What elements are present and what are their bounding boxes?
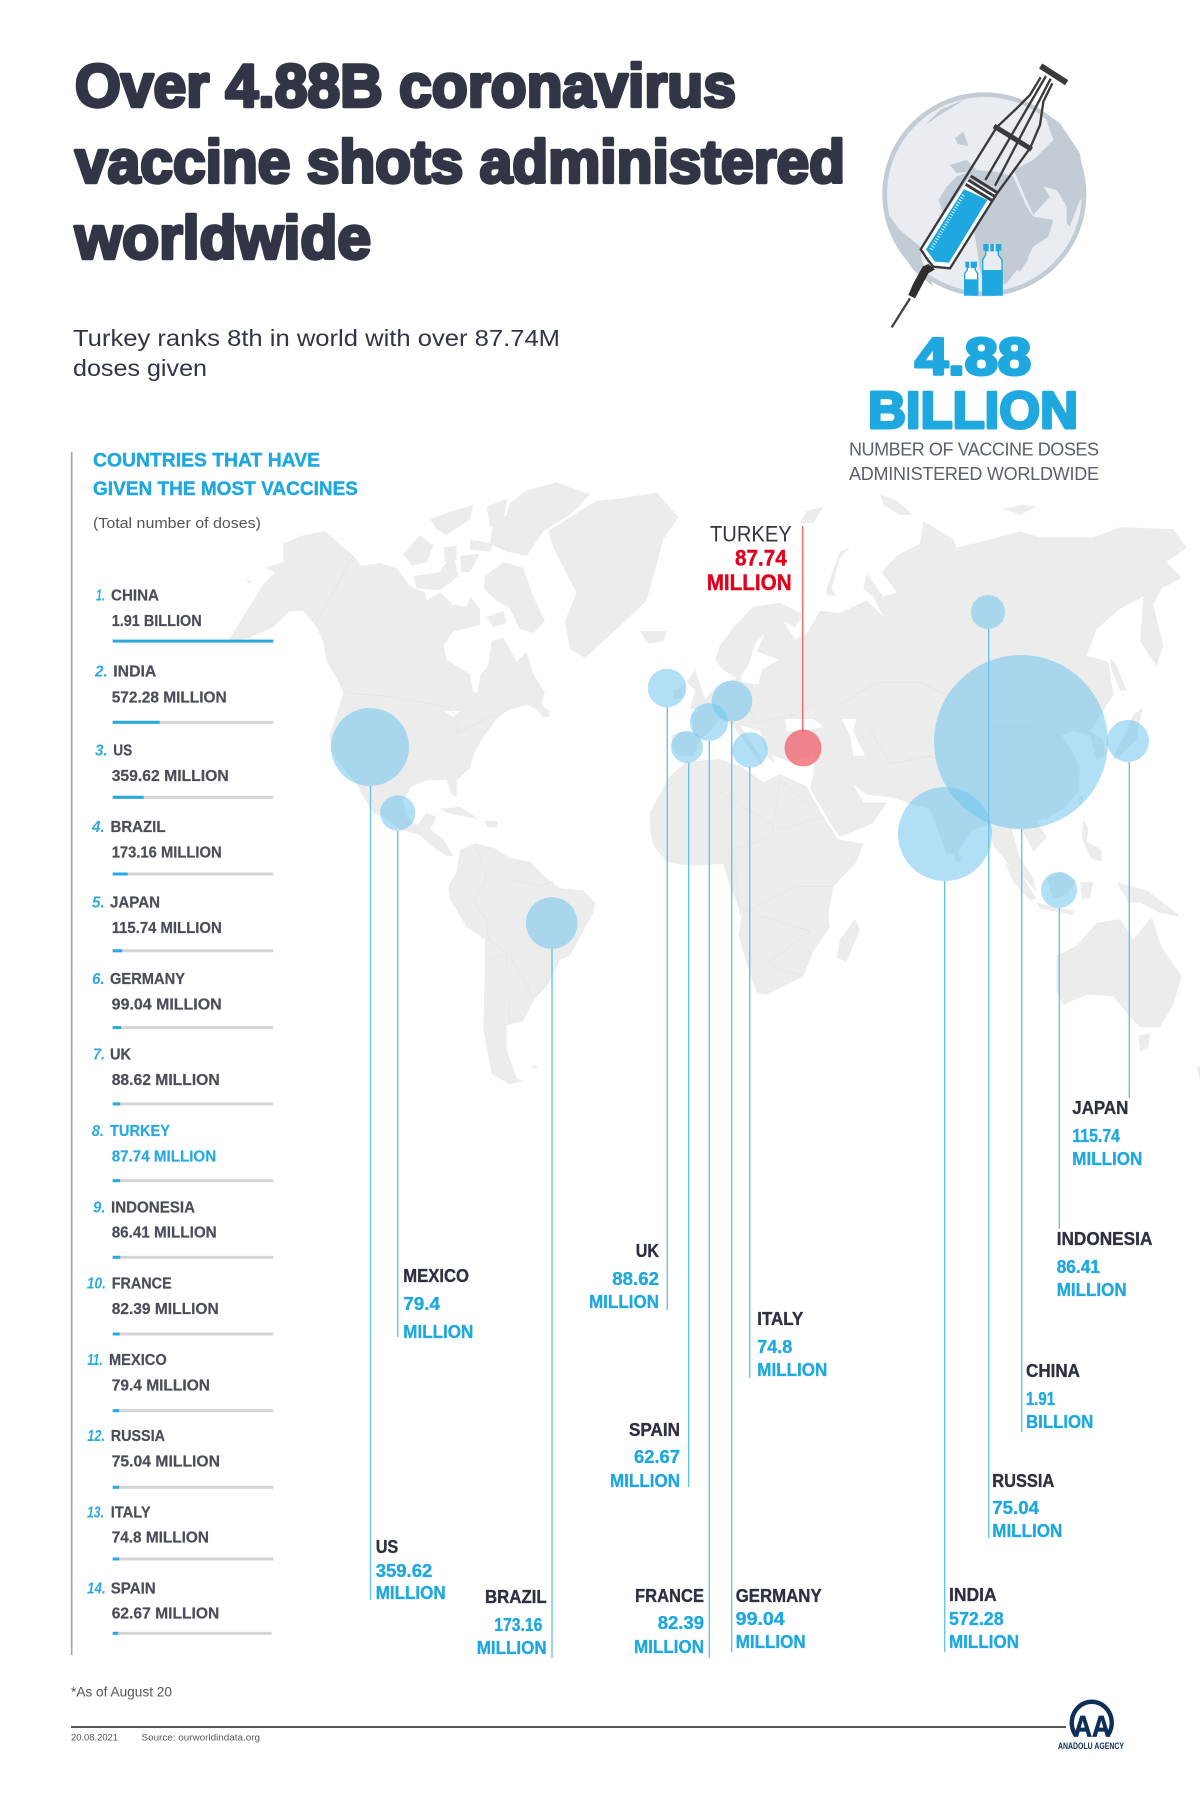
label: italy: ITALY: [757, 1308, 804, 1329]
label: germany: GERMANY: [736, 1585, 822, 1606]
bubble: us: [331, 708, 409, 786]
label: russia: MILLION: [992, 1520, 1062, 1541]
rank 11 mexico: [87, 1352, 273, 1412]
bubble: uk: [648, 669, 686, 707]
label: turkey: TURKEY: [710, 521, 792, 546]
subtitle: Turkey ranks 8th in world with over 87.74M: [73, 325, 560, 351]
rank 7 uk: UK: [110, 1046, 132, 1064]
label: indonesia: INDONESIA: [1057, 1228, 1152, 1249]
label: germany: 99.04: [736, 1608, 785, 1629]
label: us: 359.62: [376, 1560, 432, 1581]
icon: anadolu agency logo: [1058, 1702, 1125, 1751]
rank 9 indonesia: 9.: [93, 1199, 106, 1216]
rank 12 russia: 12.: [87, 1428, 105, 1445]
label: italy: 74.8: [757, 1336, 792, 1357]
rank 7 uk: [93, 1046, 273, 1105]
label: mexico: MEXICO: [403, 1265, 469, 1286]
rank 9 indonesia: INDONESIA: [111, 1199, 195, 1216]
label: brazil: BRAZIL: [485, 1586, 547, 1607]
rank 4 brazil: 4.: [91, 819, 105, 836]
bubble: brazil: [526, 897, 578, 949]
rank 8 turkey: [92, 1123, 273, 1182]
label: russia: 75.04: [992, 1497, 1040, 1518]
rank 1 china: [96, 588, 273, 643]
rank 14 spain: 62.67 MILLION: [112, 1606, 219, 1623]
subtitle: doses given: [73, 355, 207, 381]
label: germany: MILLION: [736, 1631, 806, 1652]
label: china: 1.91: [1026, 1388, 1055, 1409]
label: brazil: [477, 1586, 547, 1658]
rank 11 mexico: MEXICO: [109, 1352, 167, 1369]
footnote: *As of August 20: [71, 1684, 172, 1700]
list heading: [93, 450, 358, 500]
icon: anadolu agency logo: AA: [1074, 1710, 1110, 1744]
rank 12 russia: [87, 1428, 273, 1489]
label: uk: MILLION: [589, 1291, 659, 1312]
footer rule and source: 20.08.2021: [71, 1733, 118, 1743]
label: spain: MILLION: [610, 1470, 680, 1491]
label: china: [1026, 1360, 1093, 1432]
rank 9 indonesia: [93, 1199, 273, 1259]
title: Over 4.88B coronavirus: [75, 52, 736, 120]
globe and syringe illustration: [882, 66, 1086, 327]
bubble: japan: [1107, 720, 1149, 762]
label: turkey: 87.74: [735, 546, 787, 570]
rank 13 italy: 13.: [87, 1504, 104, 1521]
title: vaccine shots administered: [75, 128, 845, 196]
label: mexico: MILLION: [403, 1321, 473, 1342]
map bubbles: [331, 595, 1149, 949]
rank 5 japan: [92, 895, 273, 952]
rank 10 france: 10.: [87, 1275, 106, 1292]
bubble: spain: [671, 731, 703, 763]
bubble: germany: [712, 681, 752, 721]
label: japan: MILLION: [1072, 1148, 1142, 1169]
rank 3 us: 359.62 MILLION: [112, 768, 229, 785]
rank 3 us: 3.: [95, 743, 108, 760]
label: russia: RUSSIA: [992, 1470, 1054, 1491]
headline stat: 4.88 billion: BILLION: [868, 382, 1078, 440]
rank 3 us: [95, 743, 273, 799]
rank 1 china: 1.91 BILLION: [112, 613, 202, 630]
rank 12 russia: RUSSIA: [111, 1428, 165, 1445]
list heading: COUNTRIES THAT HAVE: [93, 450, 320, 472]
label: france: FRANCE: [635, 1585, 704, 1606]
icon: vaccine vials: [964, 244, 1003, 296]
rank 13 italy: [87, 1504, 273, 1560]
rank 13 italy: ITALY: [111, 1504, 151, 1521]
label: italy: [757, 1308, 827, 1380]
rank 2 india: 572.28 MILLION: [112, 689, 227, 706]
rank 6 germany: 99.04 MILLION: [112, 996, 222, 1014]
title: worldwide: [74, 204, 371, 272]
label: us: US: [376, 1536, 398, 1557]
rank 10 france: [87, 1275, 273, 1336]
label: mexico: [403, 1265, 473, 1342]
headline stat: 4.88 billion: NUMBER OF VACCINE DOSES: [849, 440, 1099, 460]
rank 4 brazil: [91, 819, 273, 876]
icon: globe: [882, 92, 1086, 296]
bubble: china: [934, 655, 1108, 829]
label: india: [949, 1584, 1019, 1652]
rank 8 turkey: 87.74 MILLION: [112, 1149, 216, 1166]
rank 5 japan: 5.: [92, 895, 105, 912]
rank 14 spain: SPAIN: [111, 1580, 156, 1597]
label: japan: 115.74: [1072, 1125, 1121, 1146]
rank 11 mexico: 79.4 MILLION: [112, 1378, 210, 1395]
rank 7 uk: 7.: [93, 1046, 105, 1064]
rank 14 spain: [87, 1580, 272, 1635]
label: spain: 62.67: [634, 1446, 680, 1467]
label: spain: [610, 1419, 680, 1491]
label: indonesia: [1057, 1228, 1152, 1300]
label: uk: [589, 1240, 659, 1312]
rank 9 indonesia: 86.41 MILLION: [112, 1225, 217, 1242]
rank 12 russia: 75.04 MILLION: [112, 1454, 220, 1471]
label: us: MILLION: [376, 1582, 446, 1603]
label: turkey: MILLION: [707, 570, 792, 595]
world map: [227, 482, 1200, 1084]
rank 10 france: 82.39 MILLION: [112, 1301, 219, 1318]
rank 4 brazil: BRAZIL: [110, 819, 166, 836]
rank 5 japan: 115.74 MILLION: [112, 920, 222, 937]
label: italy: MILLION: [757, 1359, 827, 1380]
rank 1 china: CHINA: [111, 588, 159, 605]
rank 3 us: US: [113, 743, 132, 760]
rank 6 germany: GERMANY: [110, 971, 185, 988]
label: us: [376, 1536, 446, 1603]
label: india: 572.28: [949, 1608, 1004, 1629]
title: [74, 52, 845, 272]
label: china: BILLION: [1026, 1411, 1093, 1432]
label: india: MILLION: [949, 1631, 1019, 1652]
label: spain: SPAIN: [629, 1419, 680, 1440]
rank 2 india: [94, 664, 273, 724]
rank 2 india: INDIA: [113, 664, 156, 681]
bubble: france: [690, 703, 728, 741]
rank 10 france: FRANCE: [112, 1275, 172, 1292]
rank 14 spain: 14.: [87, 1580, 106, 1597]
headline stat: 4.88 billion: 4.88: [915, 328, 1031, 386]
bubble: indonesia: [1041, 872, 1077, 908]
label: germany: [736, 1585, 822, 1652]
icon: anadolu agency logo: ANADOLU AGENCY: [1058, 1741, 1125, 1751]
rank 8 turkey: 8.: [92, 1123, 104, 1140]
rank 6 germany: 6.: [92, 971, 105, 988]
label: brazil: 173.16: [494, 1614, 542, 1635]
label: france: [634, 1585, 704, 1657]
rank 5 japan: JAPAN: [110, 895, 160, 912]
subtitle: [73, 325, 560, 381]
rank 7 uk: 88.62 MILLION: [112, 1072, 220, 1089]
bubble: russia: [971, 595, 1005, 629]
bubble: turkey: [784, 730, 822, 766]
label: brazil: MILLION: [477, 1637, 547, 1658]
label: japan: JAPAN: [1072, 1097, 1128, 1118]
label: france: MILLION: [634, 1636, 704, 1657]
label: indonesia: 86.41: [1057, 1256, 1100, 1277]
rank 6 germany: [92, 971, 273, 1029]
icon: syringe: [892, 66, 1067, 327]
bubble: mexico: [380, 795, 415, 831]
label: uk: UK: [636, 1240, 659, 1261]
label: uk: 88.62: [612, 1268, 659, 1289]
rank 8 turkey: TURKEY: [110, 1123, 170, 1140]
rank 13 italy: 74.8 MILLION: [112, 1530, 209, 1547]
rank 11 mexico: 11.: [87, 1352, 103, 1369]
label: china: CHINA: [1026, 1360, 1080, 1381]
list heading: GIVEN THE MOST VACCINES: [93, 478, 358, 500]
turkey callout: [707, 521, 822, 766]
list note: (Total number of doses): [93, 515, 261, 532]
rank 2 india: 2.: [94, 664, 108, 681]
footer rule and source: Source: ourworldindata.org: [142, 1733, 260, 1743]
headline stat: 4.88 billion: ADMINISTERED WORLDWIDE: [849, 464, 1099, 484]
label: japan: [1072, 1097, 1142, 1169]
label: france: 82.39: [658, 1612, 704, 1633]
footer rule and source: [71, 1726, 1066, 1743]
label: india: INDIA: [949, 1584, 997, 1605]
label: turkey: [707, 521, 792, 595]
leader lines: [370, 629, 1129, 1658]
headline stat: 4.88 billion: [849, 328, 1099, 484]
rank 1 china: 1.: [96, 588, 105, 605]
panel: country ranking list: [72, 450, 358, 1655]
label: indonesia: MILLION: [1057, 1279, 1127, 1300]
rank 4 brazil: 173.16 MILLION: [112, 844, 222, 862]
label: mexico: 79.4: [403, 1293, 441, 1314]
label: russia: [992, 1470, 1062, 1541]
bubble: india: [898, 787, 992, 881]
bubble: italy: [732, 732, 768, 768]
